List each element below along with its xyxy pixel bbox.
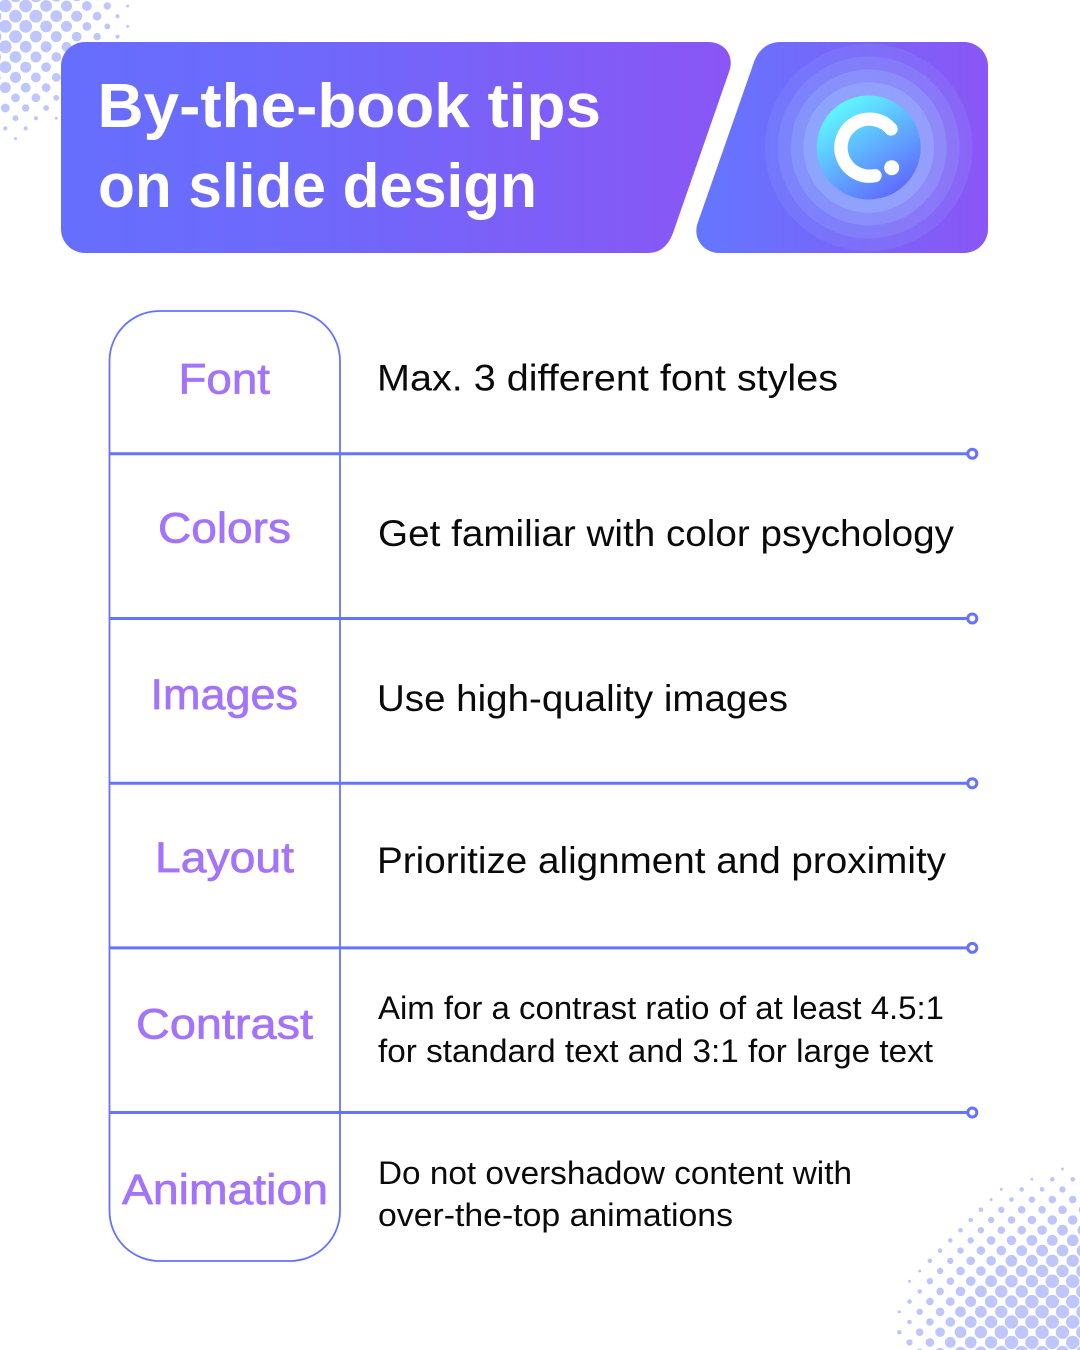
logo panel [696,42,988,253]
row: Contrast: for standard text and 3:1 for large text [378,1033,933,1069]
row: Colors: Colors [158,506,291,552]
row: Animation: over-the-top animations [378,1197,733,1233]
row: Contrast: Aim for a contrast ratio of at least 4.5:1 [378,990,944,1026]
table frame and row lines [109,311,977,1261]
row: Animation [122,1155,852,1233]
row: Font [178,356,838,404]
row: Layout: Prioritize alignment and proximity [377,839,946,881]
row: Contrast: Contrast [136,1002,313,1048]
row: Animation: Do not overshadow content with [378,1155,852,1191]
row: Images: Images [150,672,298,719]
title: By-the-book tips [98,72,601,141]
row: Colors: Get familiar with color psychology [378,512,954,554]
row: Colors [158,506,954,554]
row: Font: Font [178,356,270,404]
title banner [61,42,731,253]
concentric rings [765,44,972,251]
row: Images [150,672,788,719]
halftone dots: top left [0,0,128,139]
title [98,72,601,221]
row: Font: Max. 3 different font styles [377,356,838,398]
row: Animation: Animation [122,1167,328,1214]
title: on slide design [98,152,537,221]
halftone dots: bottom right [899,1169,1080,1350]
row: Layout [155,835,946,882]
icon: C logo [817,96,921,200]
row: Layout: Layout [155,835,294,882]
row: Images: Use high-quality images [377,677,788,719]
row: Contrast [136,990,944,1069]
row line end markers [968,449,977,1117]
